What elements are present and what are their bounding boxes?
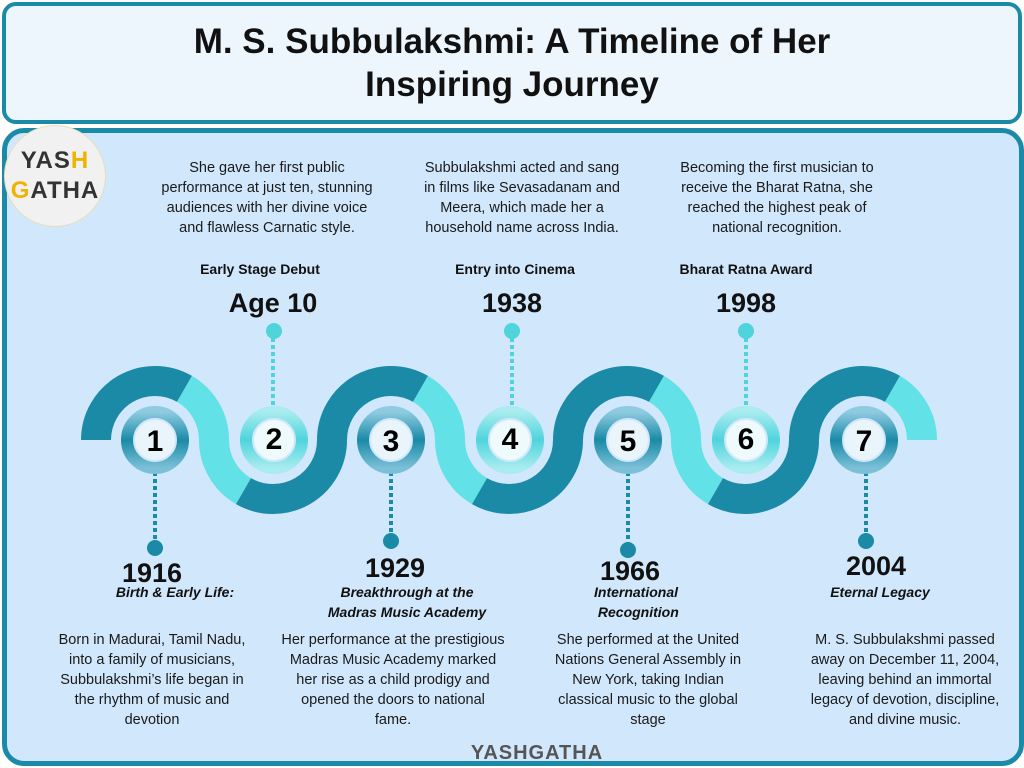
timeline wave: 4: [502, 423, 519, 456]
bottom text 7: [811, 632, 999, 728]
label 7: Eternal Legacy: [830, 584, 930, 600]
label 6: Bharat Ratna Award: [679, 261, 813, 277]
timeline wave: 6: [738, 423, 754, 456]
timeline wave: 7: [856, 425, 872, 458]
top text 3: receive the Bharat Ratna, she: [681, 180, 873, 196]
top text 2: [424, 160, 620, 236]
title box: [2, 2, 1022, 124]
top text 3: reached the highest peak of: [688, 200, 866, 216]
top text 1: She gave her first public: [189, 160, 345, 176]
bottom text 3: Her performance at the prestigious: [281, 632, 505, 648]
top text 3: Becoming the first musician to: [680, 160, 874, 176]
label 3: [328, 584, 487, 620]
year 7: 2004: [846, 551, 906, 581]
logo: [4, 125, 106, 227]
bottom text 7: leaving behind an immortal: [818, 672, 992, 688]
top text 1: performance at just ten, stunning: [161, 180, 373, 196]
bottom text 5: [555, 632, 741, 728]
logo: GATHA: [11, 177, 99, 204]
top text 2: Subbulakshmi acted and sang: [425, 160, 619, 176]
bottom text 1: into a family of musicians,: [69, 652, 235, 668]
bottom text 3: Madras Music Academy marked: [290, 652, 496, 668]
year 1: 1916: [122, 558, 182, 588]
top text 1: [161, 160, 373, 236]
label 2: Early Stage Debut: [200, 261, 320, 277]
top text 3: national recognition.: [712, 220, 842, 236]
bottom text 7: legacy of devotion, discipline,: [811, 692, 999, 708]
top text 3: [680, 160, 874, 236]
bottom text 5: She performed at the United: [557, 632, 739, 648]
timeline wave: 2: [266, 423, 282, 456]
bottom text 7: away on December 11, 2004,: [811, 652, 999, 668]
bottom text 1: Subbulakshmi’s life began in: [60, 672, 244, 688]
bottom text 1: the rhythm of music and: [75, 692, 229, 708]
year 6: 1998: [716, 288, 776, 318]
bottom text 1: [59, 632, 245, 728]
year 3: 1929: [365, 553, 425, 583]
label 5: International: [594, 584, 678, 600]
top text 2: in films like Sevasadanam and: [424, 180, 620, 196]
top text 2: Meera, which made her a: [440, 200, 604, 216]
bottom text 3: opened the doors to national: [301, 692, 485, 708]
bottom text 5: classical music to the global: [558, 692, 738, 708]
year 4: 1938: [482, 288, 542, 318]
label 4: Entry into Cinema: [455, 261, 575, 277]
bottom text 5: stage: [630, 712, 666, 728]
timeline wave: 3: [383, 425, 399, 458]
title box: Inspiring Journey: [365, 65, 659, 104]
label 5: Recognition: [598, 604, 679, 620]
bottom text 5: Nations General Assembly in: [555, 652, 741, 668]
bottom text 7: M. S. Subbulakshmi passed: [815, 632, 995, 648]
label 1: Birth & Early Life:: [116, 584, 234, 600]
footer brand: YASHGATHA: [471, 742, 603, 764]
top text 2: household name across India.: [425, 220, 619, 236]
bottom text 3: fame.: [375, 712, 411, 728]
top text 1: and flawless Carnatic style.: [179, 220, 355, 236]
bottom text 1: Born in Madurai, Tamil Nadu,: [59, 632, 245, 648]
year 5: 1966: [600, 556, 660, 586]
title box: M. S. Subbulakshmi: A Timeline of Her: [194, 22, 830, 61]
bottom text 3: [281, 632, 505, 728]
timeline wave: 1: [147, 425, 163, 458]
logo: YASH: [21, 147, 89, 174]
bottom text 7: and divine music.: [849, 712, 961, 728]
label 3: Madras Music Academy: [328, 604, 486, 620]
year 2: Age 10: [229, 288, 317, 318]
bottom text 5: New York, taking Indian: [572, 672, 724, 688]
top text 1: audiences with her divine voice: [167, 200, 367, 216]
label 5: [594, 584, 679, 620]
timeline wave: 5: [620, 425, 636, 458]
bottom text 3: her rise as a child prodigy and: [296, 672, 490, 688]
label 3: Breakthrough at the: [340, 584, 474, 600]
bottom text 1: devotion: [125, 712, 179, 728]
